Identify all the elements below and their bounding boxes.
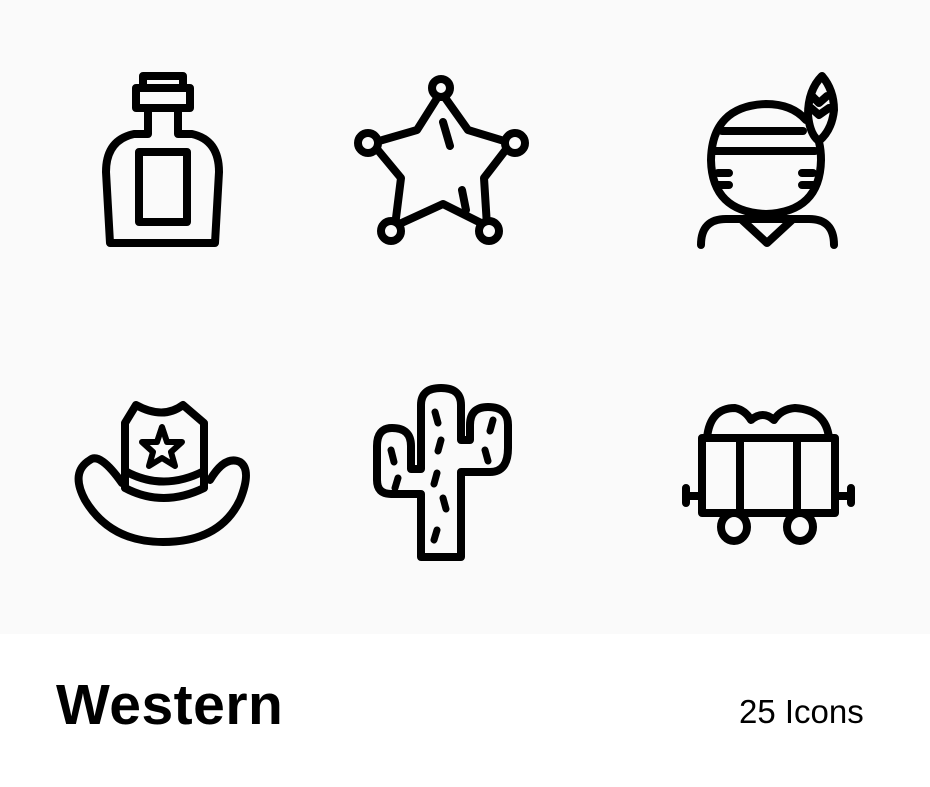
icon: sheriff star: [358, 79, 525, 241]
icon: bottle: [106, 76, 219, 243]
title: Western: [56, 673, 283, 737]
icon: native person: [701, 76, 834, 245]
text: icon count: 25 Icons: [739, 693, 864, 730]
icon: cactus: [377, 388, 508, 557]
icon: mine cart: [686, 408, 851, 541]
icon: cowboy hat: [79, 405, 246, 542]
